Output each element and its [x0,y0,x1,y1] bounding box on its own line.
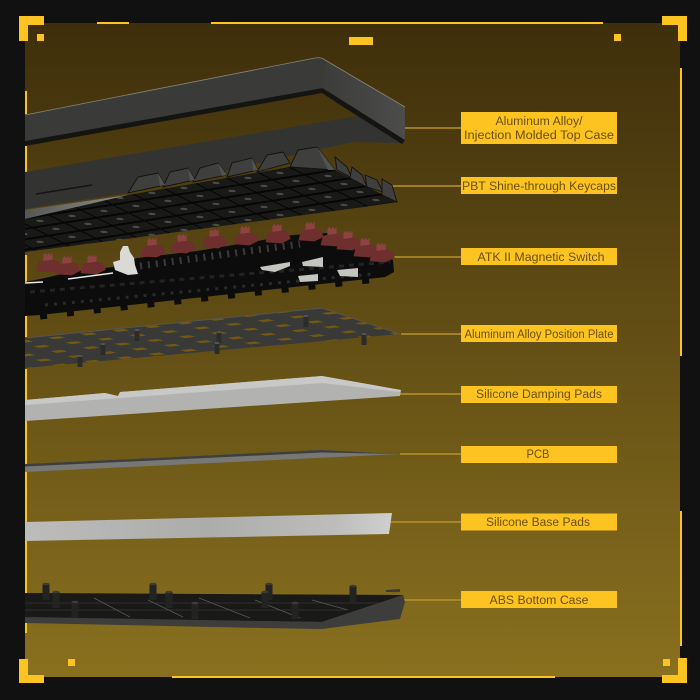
layer: top case [25,58,405,209]
layer: ABS bottom case [25,583,405,629]
layer: position plate [25,308,400,368]
label: position plate [461,325,617,342]
layer: magnetic switches [25,222,395,316]
label: PCB: PCB [526,449,550,461]
corner bracket: bottom left [19,659,75,683]
label: magnetic switch: ATK II Magnetic Switch [478,252,604,264]
top centre dash [349,37,373,45]
corner bracket: top left [19,16,44,41]
layer: keycaps [25,147,397,252]
label: keycaps: PBT Shine-through Keycaps [462,181,616,193]
label: top case [461,112,617,144]
label: magnetic switch [461,248,617,265]
label: PCB [461,446,617,463]
label: bottom case: ABS Bottom Case [490,595,588,607]
label: top case: Injection Molded Top Case [464,130,614,142]
corner bracket: top right [614,16,687,41]
layer: silicone damping pads [25,376,401,421]
corner bracket: bottom right [662,658,687,683]
white switch [113,246,138,275]
layer: silicone base pads [25,513,392,541]
label: bottom case [461,591,617,608]
label: base pads [461,514,617,530]
leader lines [390,128,461,600]
layer: PCB [25,450,400,472]
label: base pads: Silicone Base Pads [486,517,590,529]
label: damping pads: Silicone Damping Pads [476,389,602,401]
label: top case: Aluminum Alloy/ [496,116,583,128]
label: damping pads [461,386,617,403]
label: keycaps [461,177,617,194]
label: position plate: Aluminum Alloy Position Plate [464,329,614,341]
